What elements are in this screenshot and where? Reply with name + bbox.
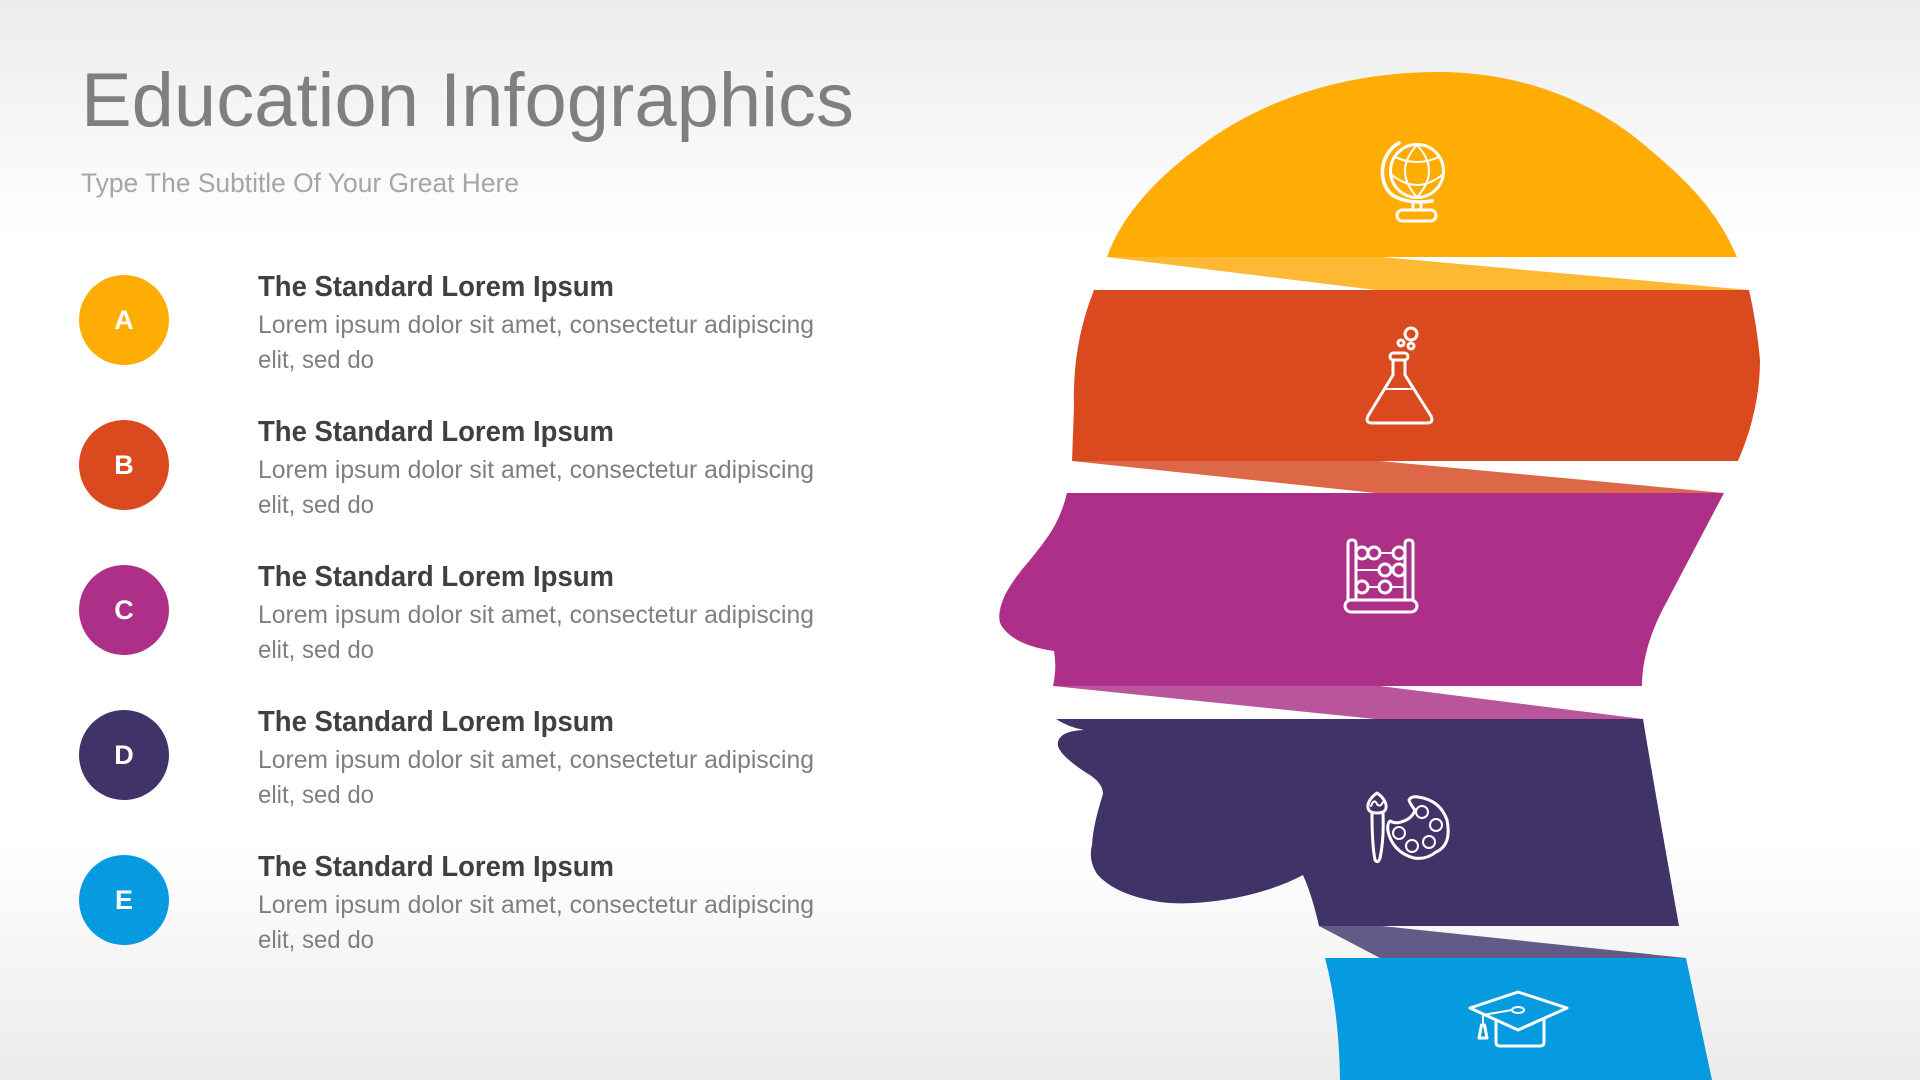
body C: Lorem ipsum dolor sit amet, consectetur adipiscing — [258, 601, 814, 629]
heading D: The Standard Lorem Ipsum — [258, 706, 614, 738]
badge A: A — [114, 305, 134, 335]
body D — [258, 746, 814, 809]
heading C: The Standard Lorem Ipsum — [258, 561, 614, 593]
head slice C: magenta nose — [999, 493, 1724, 686]
body E: elit, sed do — [258, 926, 374, 954]
body D: Lorem ipsum dolor sit amet, consectetur adipiscing — [258, 746, 814, 774]
badge E — [79, 855, 169, 945]
body B: Lorem ipsum dolor sit amet, consectetur adipiscing — [258, 456, 814, 484]
item D — [79, 706, 814, 809]
badge D: D — [114, 740, 134, 770]
head silhouette — [999, 72, 1760, 1080]
connector band yellow — [1107, 257, 1749, 290]
heading B: The Standard Lorem Ipsum — [258, 416, 614, 448]
badge E: E — [115, 885, 133, 915]
item E — [79, 851, 814, 954]
icon: graduation cap — [1470, 992, 1567, 1046]
body A: elit, sed do — [258, 346, 374, 374]
body A: Lorem ipsum dolor sit amet, consectetur adipiscing — [258, 311, 814, 339]
item B — [79, 416, 814, 519]
body B — [258, 456, 814, 519]
badge D — [79, 710, 169, 800]
head slice A: yellow crown — [1107, 72, 1737, 257]
body C: elit, sed do — [258, 636, 374, 664]
icon: abacus — [1345, 540, 1417, 612]
body D: elit, sed do — [258, 781, 374, 809]
title: Education Infographics — [81, 58, 854, 143]
connector band purple — [1319, 926, 1686, 958]
head slice D: purple jaw — [1056, 719, 1679, 926]
badge A — [79, 275, 169, 365]
head slice E: blue neck — [1325, 958, 1712, 1080]
badge C: C — [114, 595, 134, 625]
heading E: The Standard Lorem Ipsum — [258, 851, 614, 883]
heading A: The Standard Lorem Ipsum — [258, 271, 614, 303]
subtitle: Type The Subtitle Of Your Great Here — [81, 168, 519, 198]
connector band orange — [1072, 461, 1724, 493]
icon: flask — [1367, 328, 1432, 423]
icon: brush and palette — [1368, 793, 1448, 862]
body E — [258, 891, 814, 954]
badge B — [79, 420, 169, 510]
head slice B: orange forehead — [1072, 290, 1760, 461]
badge B: B — [114, 450, 134, 480]
body E: Lorem ipsum dolor sit amet, consectetur adipiscing — [258, 891, 814, 919]
body B: elit, sed do — [258, 491, 374, 519]
item C — [79, 561, 814, 664]
list: items A to E — [79, 271, 814, 954]
body C — [258, 601, 814, 664]
badge C — [79, 565, 169, 655]
icon: globe — [1382, 143, 1444, 221]
item A — [79, 271, 814, 374]
connector band magenta — [1053, 686, 1643, 719]
body A — [258, 311, 814, 374]
